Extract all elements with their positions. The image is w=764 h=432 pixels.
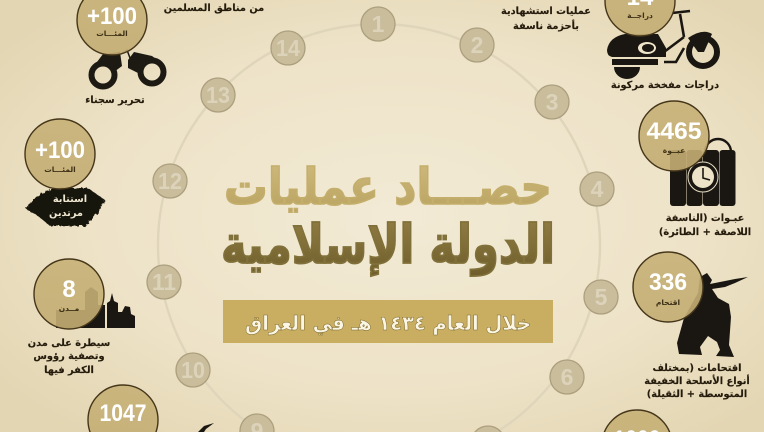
unit: اقتحام: [656, 298, 680, 307]
node 6: 6: [561, 364, 573, 390]
node 5: [584, 280, 618, 314]
stat: 1047: [88, 385, 214, 432]
node 2: 2: [471, 32, 483, 58]
node 1: 1: [372, 11, 385, 37]
node 11: [147, 265, 181, 299]
node 13: 13: [206, 82, 230, 108]
stat: cities captured: وتصفية رؤوس: [33, 351, 105, 362]
subtitle banner: خلال العام ١٤٣٤ هـ في العراق: [245, 311, 531, 336]
icon: ink blot: [26, 188, 105, 226]
stat: apostates repented: مرتدين: [49, 208, 83, 219]
numbered timeline nodes: [147, 7, 618, 432]
caption: martyrdom operations: [501, 6, 591, 32]
stat: cities captured: [28, 259, 135, 376]
value: 4465: [646, 118, 702, 145]
caption: martyrdom operations: عمليات استشهادية: [501, 6, 591, 17]
node 6: [550, 360, 584, 394]
title line 2: الدولة الإسلامية: [221, 213, 555, 276]
value circle: [34, 259, 104, 329]
value: 8: [62, 276, 76, 303]
node 9: [240, 414, 274, 432]
stat: assaults: أنواع الأسلحة الخفيفة: [644, 374, 750, 387]
value: 1047: [100, 400, 146, 427]
unit: دراجــة: [627, 11, 653, 20]
value circle: [88, 385, 158, 432]
stat: prisoners freed: [77, 0, 164, 106]
value circle: [602, 410, 672, 432]
unit: مــدن: [59, 304, 80, 313]
stat: assaults: المتوسطة + الثقيلة): [647, 389, 747, 400]
unit: المئـــات: [44, 165, 76, 174]
node 13: [201, 78, 235, 112]
stat: cities captured: الكفر فيها: [44, 365, 94, 376]
value circle: [605, 0, 675, 36]
node 3: 3: [546, 89, 558, 115]
node 14: [271, 31, 305, 65]
stat: IEDs: [639, 101, 751, 238]
caption: اقتحامات (بمختلف: [653, 363, 741, 374]
caption: تحرير سجناء: [85, 95, 145, 106]
caption: from Muslim areas: من مناطق المسلمين: [164, 3, 264, 14]
value circle: [639, 101, 709, 171]
value: +100: [87, 3, 137, 30]
node 4: [580, 172, 614, 206]
icon: handcuffs: [92, 50, 164, 86]
caption: martyrdom operations: بأحزمة ناسفة: [513, 19, 579, 32]
value circle: [25, 119, 95, 189]
node 12: [153, 164, 187, 198]
node 5: 5: [595, 284, 608, 310]
icon: skyline: [56, 287, 135, 328]
stat: assaults: [633, 252, 750, 400]
caption: عبـوات (الناسفة: [666, 213, 744, 224]
node 1: [361, 7, 395, 41]
value circle: [77, 0, 147, 55]
stat: motorcycles: [605, 0, 719, 91]
node 11: 11: [152, 269, 176, 295]
caption: استتابة: [53, 194, 87, 205]
title line 1: حصـــاد عمليات: [224, 158, 552, 216]
unit: المئـــات: [96, 29, 128, 38]
stat: IEDs: اللاصقة + الطائرة): [659, 227, 751, 238]
node 14: 14: [276, 35, 300, 61]
title: [221, 158, 555, 276]
node 10: [176, 353, 210, 387]
icon: time bomb: [670, 139, 736, 206]
node 12: 12: [158, 168, 182, 194]
unit: عبــوة: [663, 146, 685, 155]
stat: apostates repented: [25, 119, 105, 226]
value circle: [633, 252, 703, 322]
value: 336: [649, 269, 687, 296]
caption: دراجات مفخخة مركونة: [611, 80, 719, 91]
icon: kneeling RPG fighter: [677, 273, 748, 357]
stat: bottom right, cropped: [602, 410, 672, 432]
subtitle banner: [223, 300, 553, 343]
value: +100: [35, 137, 85, 164]
node 10: 10: [181, 357, 205, 383]
node 7: [471, 426, 505, 432]
caption: سيطرة على مدن: [28, 338, 110, 349]
node 3: [535, 85, 569, 119]
node 2: [460, 28, 494, 62]
icon: weapon fragment: [198, 423, 214, 432]
node 4: 4: [591, 176, 604, 202]
timeline ring: [158, 24, 600, 432]
icon: motorcycle: [607, 11, 717, 79]
